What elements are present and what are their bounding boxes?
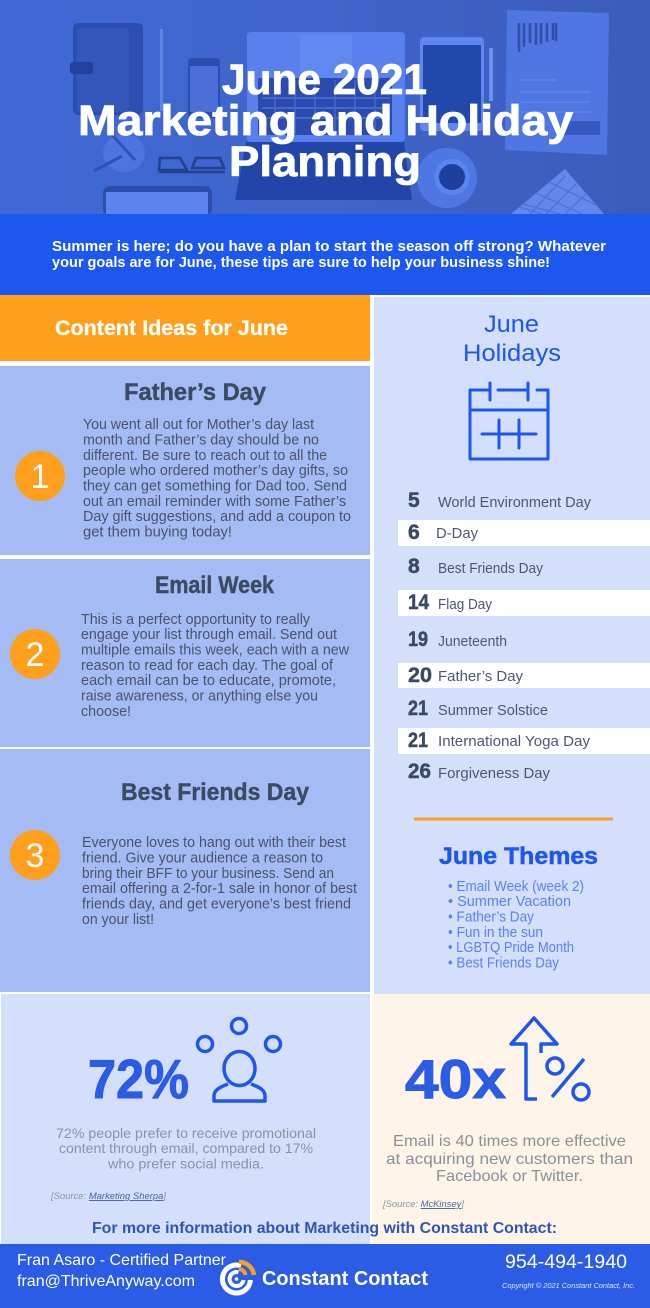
themes list: • Email Week (week 2) <box>448 879 584 895</box>
logo wordmark: Constant Contact <box>262 1268 428 1290</box>
text: Email Week tip: each email can be to educate, promote, <box>81 673 336 689</box>
holiday: 19: Juneteenth <box>438 633 507 650</box>
title <box>78 56 573 186</box>
holiday: 19: 19 <box>408 628 428 651</box>
holiday: 5 <box>408 489 591 512</box>
heading: June Themes: June Themes <box>439 843 598 870</box>
holiday: 19 <box>408 628 507 651</box>
holiday: 6 <box>398 520 650 546</box>
icon: number 2: 2 <box>26 636 44 674</box>
contact details <box>17 1252 227 1290</box>
heading: June Holidays: Holidays <box>463 340 561 367</box>
contact details: fran@ThriveAnyway.com <box>17 1273 195 1290</box>
holiday: 21 yoga <box>398 728 650 754</box>
holiday: 14: Flag Day <box>438 596 492 613</box>
photo: smartphone <box>188 58 220 118</box>
holiday: 8: Best Friends Day <box>438 560 543 577</box>
text: Email Week tip: choose! <box>81 704 131 720</box>
holiday: 21 yoga: International Yoga Day <box>438 733 591 750</box>
text: 40x description: at acquiring new customers than <box>386 1151 633 1168</box>
text: Father's Day tip: they can get something for Dad too. Send <box>83 478 347 494</box>
themes list: • Summer Vacation <box>448 894 571 910</box>
text: Best Friends Day tip: friend. Give your audience a reason to <box>82 850 323 866</box>
panel: 72% stat <box>1 994 370 1244</box>
holiday: 5: World Environment Day <box>438 494 591 511</box>
intro text: your goals are for June, these tips are sure to help your business shine! <box>52 254 550 271</box>
text: Email Week tip: raise awareness, or anything else you <box>81 688 318 704</box>
icon: up arrow with percent <box>511 1018 589 1100</box>
panel: content ideas heading: Content Ideas for June <box>55 317 288 340</box>
text: Best Friends Day tip <box>82 835 357 928</box>
holiday: 21 solstice: 21 <box>408 697 428 720</box>
stat: 40x: 40x <box>405 1048 506 1110</box>
photo: white tablet device <box>420 37 493 131</box>
panel: Email Week <box>0 559 370 747</box>
text: 72% description: 72% people prefer to receive promotional <box>56 1125 316 1141</box>
holiday: 14: 14 <box>408 591 429 614</box>
panel: 40x stat <box>372 994 650 1244</box>
holiday: 26: Forgiveness Day <box>438 765 550 782</box>
text: 40x description: Email is 40 times more effective <box>393 1133 626 1150</box>
text: 72% description <box>56 1125 316 1172</box>
text: Email Week tip: reason to read for each day. The goal of <box>81 658 334 674</box>
text: Father's Day tip: out an email reminder with some Father’s <box>83 494 346 510</box>
holiday: 26: 26 <box>408 760 431 783</box>
icon: number 1: 1 <box>31 458 49 496</box>
holiday: 21 solstice <box>408 697 548 720</box>
photo: tablet <box>103 186 212 216</box>
contact details: Fran Asaro - Certified Partner <box>17 1252 227 1269</box>
panel: Father's Day <box>0 366 370 555</box>
holiday: 5: 5 <box>408 489 420 512</box>
icon: number 1 <box>15 451 65 501</box>
photo: laptop <box>235 32 412 200</box>
photo: keyboard <box>511 169 604 214</box>
themes list: • Fun in the sun <box>448 925 543 941</box>
text: Father's Day tip: different. Be sure to reach out to all the <box>83 448 327 464</box>
title: June 2021 <box>222 56 427 104</box>
icon: person with circles <box>198 1018 280 1101</box>
themes list: • Best Friends Day <box>448 956 560 972</box>
heading: Father's Day: Father’s Day <box>124 379 267 406</box>
icon: number 3: 3 <box>26 837 44 875</box>
text: Father's Day tip <box>83 417 351 540</box>
holiday: 6: D-Day <box>436 525 478 542</box>
holiday: 21 yoga: 21 <box>408 729 428 752</box>
heading: Email Week: Email Week <box>155 572 275 599</box>
intro text <box>52 238 606 271</box>
holiday: 20: Father’s Day <box>438 668 523 685</box>
holiday: 8: 8 <box>408 555 420 578</box>
icon: number 3 <box>10 830 60 880</box>
text: Best Friends Day tip: bring their BFF to your business. Send an <box>82 866 334 882</box>
photo: pen cup <box>94 134 145 172</box>
text: Best Friends Day tip: Everyone loves to hang out with their best <box>82 835 346 851</box>
panel: content ideas heading <box>0 295 370 361</box>
text: 72% description: content through email, compared to 17% <box>59 1140 313 1156</box>
text: Best Friends Day tip: friends day, and get everyone’s best friend <box>82 896 351 912</box>
holiday: 21 solstice: Summer Solstice <box>438 702 548 719</box>
photo: pencil <box>160 29 163 111</box>
text: Father's Day tip: get them buying today! <box>83 524 232 540</box>
holiday: 8 <box>408 555 543 578</box>
themes list: • LGBTQ Pride Month <box>448 940 574 956</box>
text: Email Week tip: engage your list through email. Send out <box>81 627 337 643</box>
icon: number 2 <box>10 629 60 679</box>
holiday: 20: 20 <box>408 664 432 687</box>
header photo banner <box>0 0 650 216</box>
title: Planning <box>229 138 421 186</box>
text: Father's Day tip: Day gift suggestions, and add a coupon to <box>83 509 351 525</box>
intro text: Summer is here; do you have a plan to start the season off strong? Whatever <box>52 238 606 255</box>
heading: June Holidays: June <box>484 311 539 338</box>
holiday: 14 <box>398 590 650 616</box>
footer <box>0 1244 650 1308</box>
stat: 72%: 72% <box>88 1048 189 1110</box>
holiday: 20 <box>398 663 650 688</box>
holiday: 6: 6 <box>408 521 420 544</box>
panel: Best Friends Day <box>0 749 370 992</box>
copyright: Copyright © 2021 Constant Contact, Inc. <box>502 1281 635 1290</box>
photo: coffee cup <box>417 148 477 208</box>
text: Father's Day tip: people who ordered mother’s day gifts, so <box>83 463 348 479</box>
text: Best Friends Day tip: on your list! <box>82 912 154 928</box>
title: Marketing and Holiday <box>78 97 573 145</box>
photo: glasses <box>159 158 225 172</box>
photo: report paper <box>505 10 609 155</box>
text: Father's Day tip: month and Father’s day should be no <box>83 432 319 448</box>
themes list: • Father’s Day <box>448 910 535 926</box>
phone number: 954-494-1940 <box>505 1252 627 1273</box>
text: Father's Day tip: You went all out for Mother’s day last <box>83 417 314 433</box>
text: 40x description: Facebook or Twitter. <box>436 1168 583 1185</box>
text: Email Week tip <box>81 612 350 720</box>
icon: Constant Contact logo <box>222 1262 254 1293</box>
photo: notebook <box>70 23 143 115</box>
text: Email Week tip: multiple emails this week, each with a new <box>81 642 350 658</box>
holiday: 26 <box>408 760 550 783</box>
panel: June holidays and themes <box>374 297 650 994</box>
text: 40x description <box>386 1133 633 1185</box>
holiday list <box>398 489 650 783</box>
text: Email Week tip: This is a perfect opportunity to really <box>81 612 311 628</box>
intro band <box>0 214 650 295</box>
call to action heading: For more information about Marketing with Constant Contact: <box>92 1220 557 1237</box>
icon: calendar <box>470 383 548 459</box>
heading: June Holidays <box>463 311 561 367</box>
text: Best Friends Day tip: email offering a 2-for-1 sale in honor of best <box>82 881 357 897</box>
source: McKinsey: [Source: McKinsey] <box>382 1199 464 1210</box>
themes list <box>448 879 584 972</box>
text: 72% description: who prefer social media. <box>107 1156 264 1172</box>
heading: Best Friends Day: Best Friends Day <box>121 779 310 806</box>
source: Marketing Sherpa: [Source: Marketing Sherpa] <box>50 1191 166 1202</box>
